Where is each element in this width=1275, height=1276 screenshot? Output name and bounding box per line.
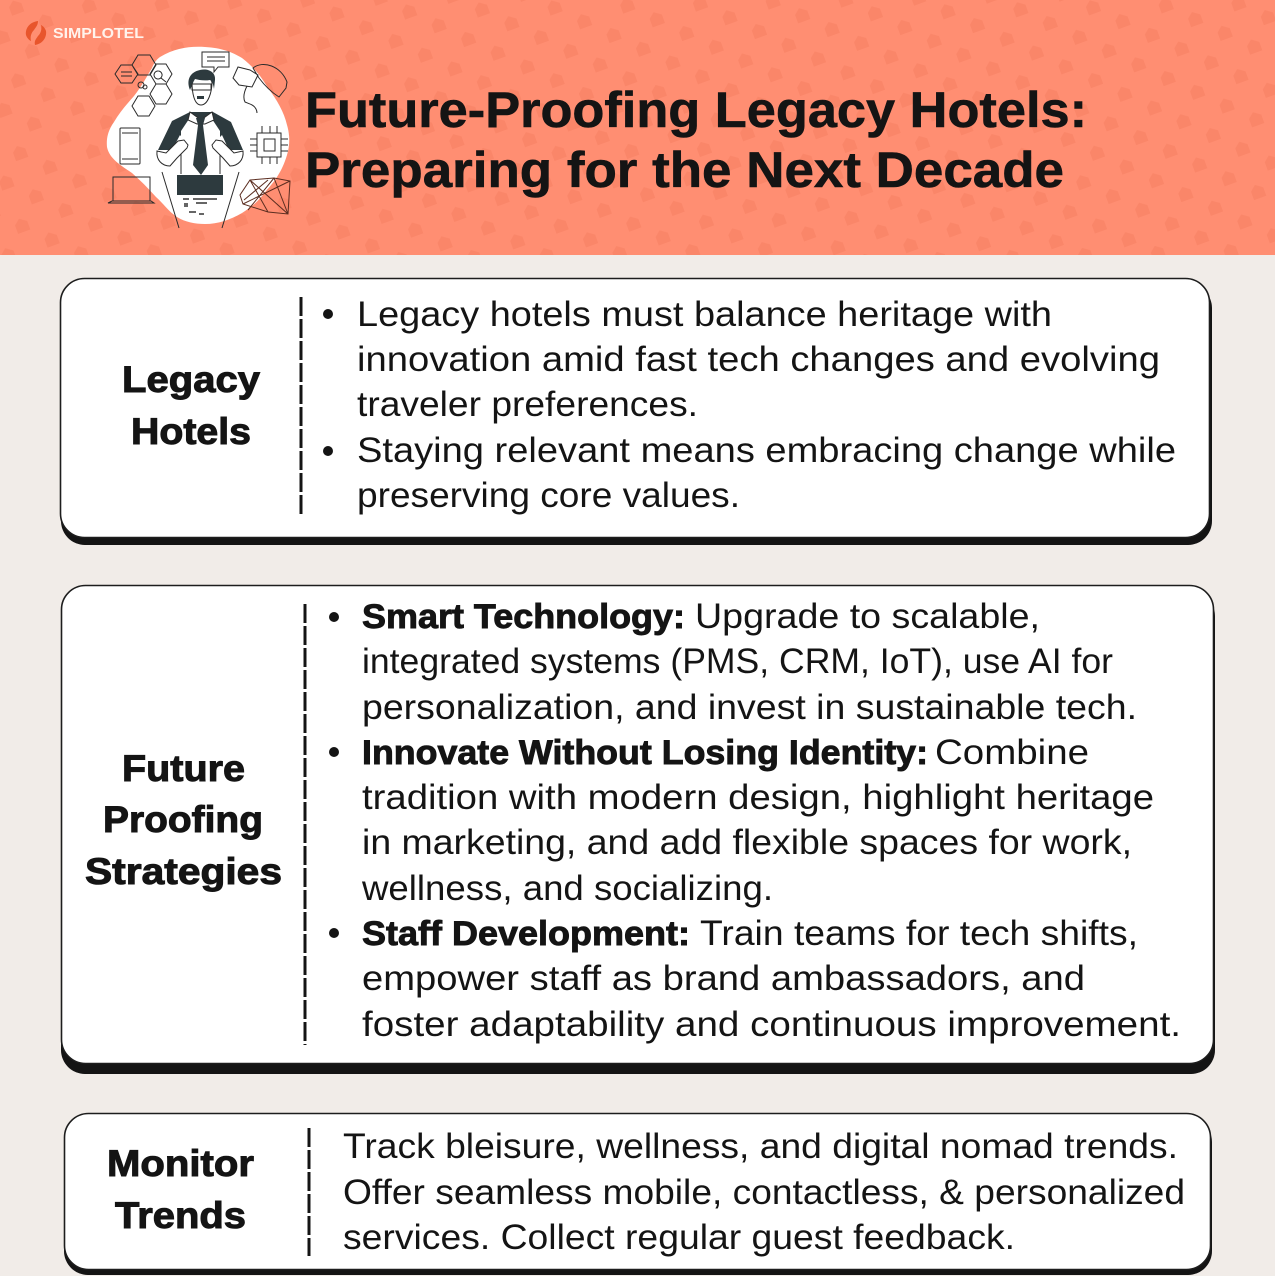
bullet list: legacy hotels: Staying relevant means embracing change while — [357, 431, 1176, 470]
bullet list: innovate without losing identity: wellness, and socializing. — [361, 869, 773, 908]
white blob — [107, 47, 289, 224]
text block: monitor trends: services. Collect regular guest feedback. — [343, 1218, 1015, 1257]
heading: legacy hotels — [122, 359, 260, 452]
title: Future-Proofing Legacy Hotels: — [305, 82, 1087, 138]
heading: future proofing strategies: Proofing — [103, 799, 263, 840]
icon: VR headset — [233, 64, 287, 113]
bullet list: innovate without losing identity: Innovate Without Losing Identity: — [362, 734, 928, 772]
head — [192, 76, 212, 105]
icon: microchip — [250, 126, 288, 164]
bullet list: legacy hotels: Legacy hotels must balance heritage with — [357, 295, 1052, 334]
laptop screen — [177, 175, 223, 195]
heading: future proofing strategies: Future — [122, 748, 245, 789]
icon: laptop — [108, 177, 154, 203]
illustration: professional surrounded by technology — [107, 47, 290, 228]
heading: future proofing strategies: Strategies — [85, 851, 282, 892]
bullet list: staff development: Train teams for tech shifts, — [700, 914, 1138, 953]
heading: monitor trends: Monitor — [107, 1143, 254, 1184]
arms and sleeves — [158, 112, 243, 150]
bullet list: legacy hotels: traveler preferences. — [357, 385, 698, 424]
bullet list: smart technology — [329, 597, 1137, 727]
bullet list: innovate without losing identity — [329, 733, 1154, 908]
bullet list: innovate without losing identity: tradition with modern design, highlight heritage — [362, 778, 1154, 817]
bullet list: smart technology: personalization, and invest in sustainable tech. — [362, 688, 1137, 727]
heading: monitor trends — [107, 1143, 254, 1236]
icon: network — [240, 178, 290, 214]
logo: Simplotel: SIMPLOTEL — [53, 25, 144, 42]
bullet list: legacy hotels — [323, 295, 1176, 515]
title: Preparing for the Next Decade — [305, 142, 1064, 198]
tie — [193, 118, 208, 175]
collar — [188, 112, 214, 124]
text block: monitor trends: Offer seamless mobile, contactless, & personalized — [343, 1173, 1185, 1212]
bullet list: legacy hotels: innovation amid fast tech changes and evolving — [357, 340, 1160, 379]
text block: monitor trends: Track bleisure, wellness, and digital nomad trends. — [343, 1127, 1178, 1166]
bullet list: smart technology: Smart Technology: — [362, 598, 685, 636]
bullet list: staff development: Staff Development: — [362, 915, 690, 953]
logo: Simplotel — [26, 21, 144, 45]
bullet list: staff development: foster adaptability and continuous improvement. — [362, 1005, 1181, 1044]
icon: hexagons — [115, 55, 172, 116]
text block: monitor trends — [343, 1127, 1185, 1257]
bullet list: innovate without losing identity: in marketing, and add flexible spaces for work, — [362, 823, 1132, 862]
bullet list: innovate without losing identity: Combine — [935, 733, 1089, 772]
panel: legacy hotels — [60, 278, 1212, 545]
icon: speech bubble — [202, 52, 229, 72]
right forearm and hand — [212, 140, 243, 166]
heading: legacy hotels: Hotels — [131, 411, 251, 452]
panel: future proofing strategies — [61, 586, 1215, 1074]
heading: future proofing strategies — [85, 748, 282, 892]
bullet list: smart technology: Upgrade to scalable, — [695, 597, 1040, 636]
bullet list: staff development: empower staff as brand ambassadors, and — [362, 959, 1085, 998]
shirt — [181, 119, 220, 174]
bullet list: smart technology: integrated systems (PMS, CRM, IoT), use AI for — [362, 642, 1113, 681]
heading: monitor trends: Trends — [115, 1195, 246, 1236]
icon: tablet — [120, 128, 140, 164]
heading: legacy hotels: Legacy — [122, 359, 260, 400]
person — [157, 69, 243, 228]
bullet list: staff development — [329, 914, 1181, 1044]
bullet list: legacy hotels: preserving core values. — [357, 476, 740, 515]
panel: monitor trends — [64, 1114, 1212, 1275]
header banner — [0, 0, 1275, 255]
title — [305, 82, 1087, 198]
left forearm and hand — [157, 140, 188, 166]
